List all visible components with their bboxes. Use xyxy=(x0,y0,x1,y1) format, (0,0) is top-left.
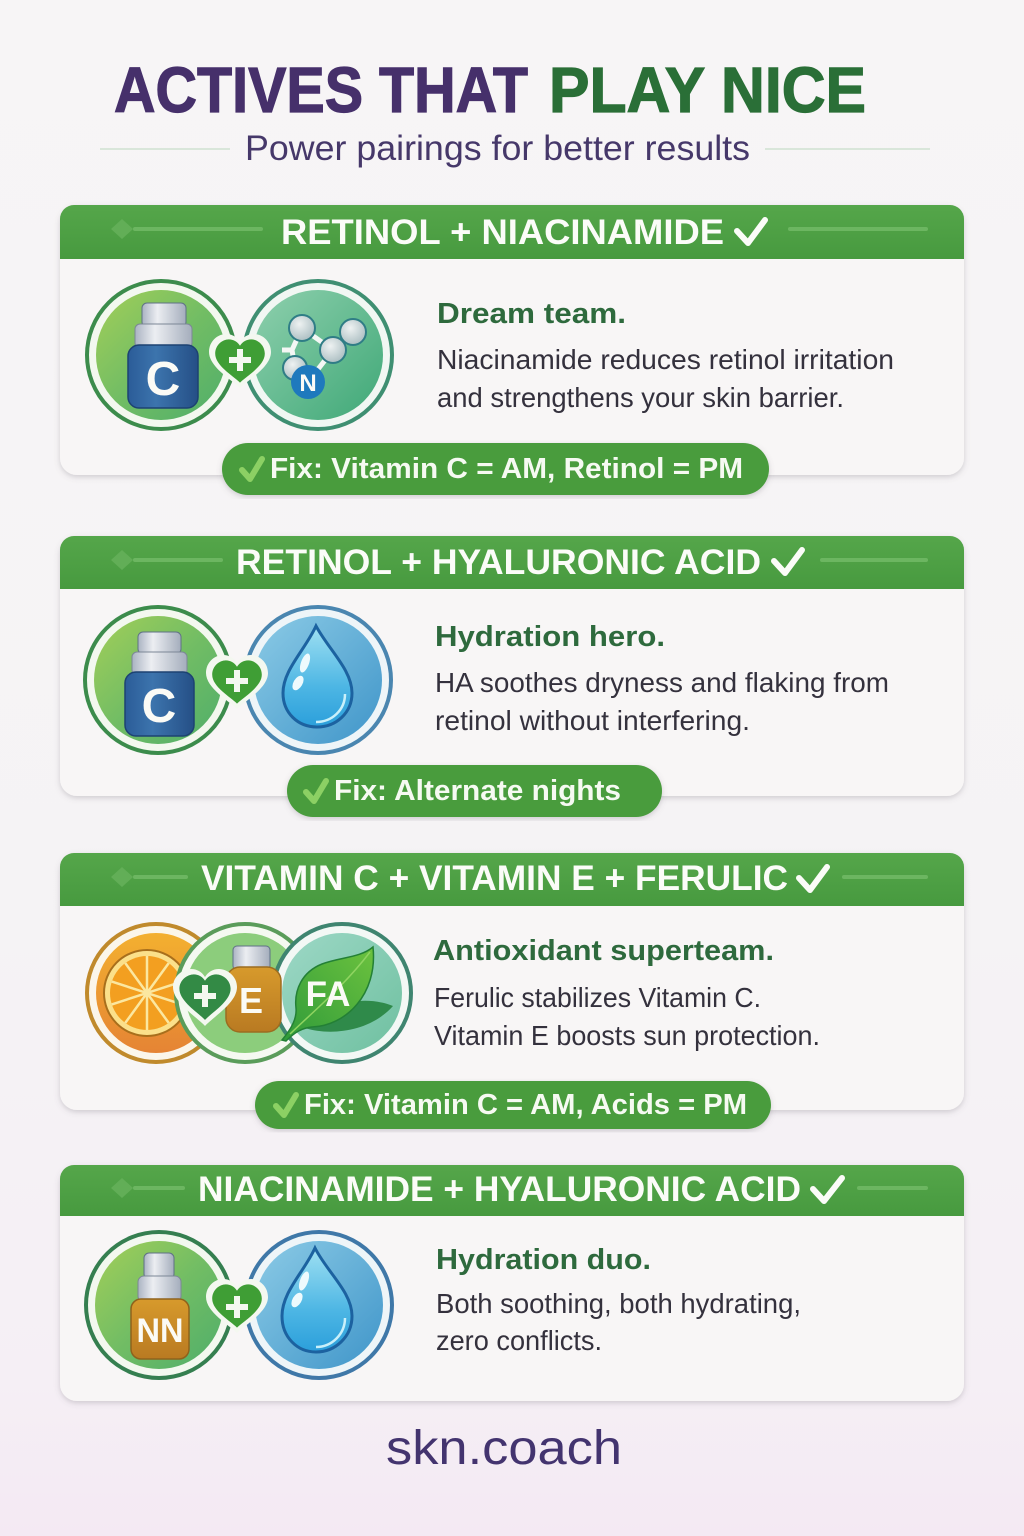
panel: retinol + hyaluronic acid xyxy=(60,536,964,817)
fix pill xyxy=(287,765,662,817)
icon: water drop xyxy=(245,607,391,753)
fix pill: Fix: Vitamin C = AM, Acids = PM xyxy=(304,1089,747,1121)
text block: retinol without interfering. xyxy=(435,705,750,736)
icon: retinol bottle: C xyxy=(142,680,176,733)
fix pill xyxy=(222,443,769,495)
icon: ferulic leaf xyxy=(282,947,393,1041)
icon: plus heart xyxy=(206,655,268,709)
subtitle: Power pairings for better results xyxy=(245,129,750,168)
panel: vitamin c + vitamin e + ferulic xyxy=(60,853,964,1129)
text block: Vitamin E boosts sun protection. xyxy=(434,1020,820,1051)
heading: NIACINAMIDE + HYALURONIC ACID xyxy=(198,1170,801,1209)
card xyxy=(60,853,964,1110)
card xyxy=(60,1165,964,1401)
text block: Hydration hero. xyxy=(435,621,665,653)
icon: niacinamide bottle: NN xyxy=(136,1312,184,1350)
icon: retinol bottle: C xyxy=(146,353,180,406)
icon: vitamin e bottle xyxy=(176,924,411,1062)
icon: check xyxy=(799,867,827,890)
text block: Both soothing, both hydrating, xyxy=(436,1288,801,1319)
icon: plus heart xyxy=(173,969,237,1026)
footer brand: skn.coach xyxy=(386,1422,622,1475)
icon: niacinamide molecule xyxy=(244,281,392,429)
icon: ferulic leaf: FA xyxy=(306,975,350,1014)
header bar xyxy=(60,536,964,589)
text block: Antioxidant superteam. xyxy=(433,935,774,967)
card xyxy=(60,536,964,796)
panel: retinol + niacinamide xyxy=(60,205,964,495)
text block: zero conflicts. xyxy=(436,1325,602,1356)
fix pill: Fix: Vitamin C = AM, Retinol = PM xyxy=(270,453,743,485)
fix pill: Fix: Alternate nights xyxy=(334,775,621,807)
header bar xyxy=(60,1165,964,1216)
text block xyxy=(433,935,820,1051)
panel: niacinamide + hyaluronic acid xyxy=(60,1165,964,1401)
text block xyxy=(435,621,889,736)
icon: check xyxy=(774,550,802,573)
title: PLAY NICE xyxy=(549,54,866,126)
text block xyxy=(436,1244,801,1356)
icon: orange slice xyxy=(87,924,225,1062)
header bar xyxy=(60,853,964,906)
icon: plus heart xyxy=(206,1279,268,1333)
text block: HA soothes dryness and flaking from xyxy=(435,667,889,698)
icon: vitamin e bottle: E xyxy=(239,980,263,1021)
icon: check xyxy=(813,1178,842,1201)
text block xyxy=(437,298,894,413)
heading: VITAMIN C + VITAMIN E + FERULIC xyxy=(201,859,788,898)
icon: retinol bottle xyxy=(85,607,231,753)
heading: RETINOL + NIACINAMIDE xyxy=(281,213,724,252)
icon: antioxidant trio xyxy=(87,924,411,1062)
title: ACTIVES THAT xyxy=(114,54,528,126)
text block: Dream team. xyxy=(437,298,626,330)
icon: niacinamide molecule: N xyxy=(299,370,317,397)
text block: Niacinamide reduces retinol irritation xyxy=(437,344,894,375)
icon: water drop xyxy=(246,1232,392,1378)
card xyxy=(60,205,964,475)
text block: Ferulic stabilizes Vitamin C. xyxy=(434,982,761,1013)
heading: RETINOL + HYALURONIC ACID xyxy=(236,543,761,582)
icon: retinol bottle xyxy=(87,281,235,429)
header bar xyxy=(60,205,964,259)
icon: plus heart xyxy=(209,334,271,388)
text block: and strengthens your skin barrier. xyxy=(437,382,844,413)
fix pill xyxy=(255,1081,771,1129)
icon: check xyxy=(737,220,765,243)
icon: niacinamide bottle xyxy=(86,1232,232,1378)
text block: Hydration duo. xyxy=(436,1244,651,1276)
